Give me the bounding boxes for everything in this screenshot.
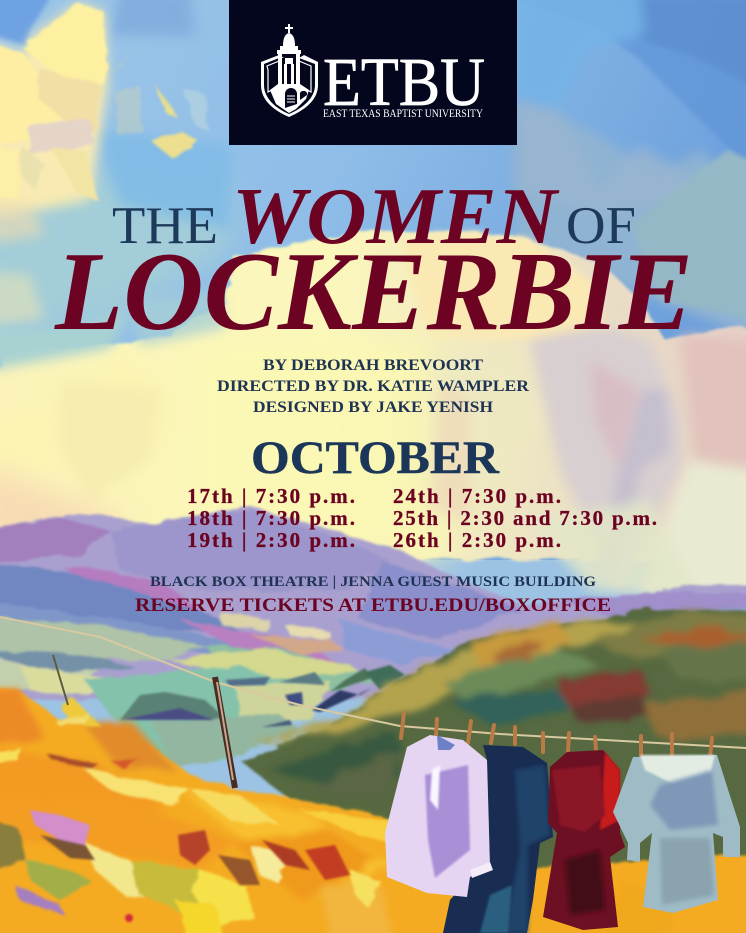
tree clusters [120, 665, 405, 727]
second week [393, 484, 657, 552]
designer: DESIGNED BY JAKE YENISH [253, 399, 493, 416]
month heading: OCTOBER [251, 432, 500, 484]
second week: 26th | 2:30 p.m. [393, 528, 561, 552]
yellow brush strokes top left [0, 3, 208, 330]
flowers and red strokes [30, 810, 350, 922]
first week: 18th | 7:30 p.m. [187, 506, 355, 530]
right hillside [240, 610, 746, 870]
title [54, 173, 693, 354]
second week: 25th | 2:30 and 7:30 p.m. [393, 506, 657, 530]
second week: 24th | 7:30 p.m. [393, 484, 561, 508]
navy coat [443, 745, 553, 933]
clothes pins [401, 713, 712, 758]
credits [217, 357, 530, 416]
first week: 17th | 7:30 p.m. [187, 484, 355, 508]
laundry [385, 735, 740, 933]
sky [0, 0, 746, 560]
women: WOMEN [232, 173, 560, 261]
first week: 19th | 2:30 p.m. [187, 528, 355, 552]
director: DIRECTED BY DR. KATIE WAMPLER [217, 378, 530, 395]
foreground golden field [0, 685, 746, 933]
ticket link: RESERVE TICKETS AT ETBU.EDU/BOXOFFICE [135, 595, 611, 616]
of: OF [566, 197, 636, 255]
logo block [229, 0, 517, 145]
playwright: BY DEBORAH BREVOORT [263, 357, 484, 374]
cloud bank [0, 230, 746, 610]
university name: EAST TEXAS BAPTIST UNIVERSITY [323, 108, 484, 120]
performance dates [187, 484, 657, 552]
fence post [53, 655, 235, 788]
pale blue dress [613, 755, 740, 913]
venue: BLACK BOX THEATRE | JENNA GUEST MUSIC BUILDING [150, 574, 596, 590]
lavender shirt [385, 735, 493, 897]
clothesline rope [0, 617, 746, 748]
first week [187, 484, 355, 552]
lockerbie: LOCKERBIE [54, 230, 693, 354]
red robe [543, 750, 625, 930]
wordmark: ETBU [323, 44, 485, 120]
mid fields [0, 615, 380, 770]
the: THE [112, 197, 218, 255]
distant purple hills [0, 505, 746, 700]
icon: bell tower shield [261, 24, 318, 117]
